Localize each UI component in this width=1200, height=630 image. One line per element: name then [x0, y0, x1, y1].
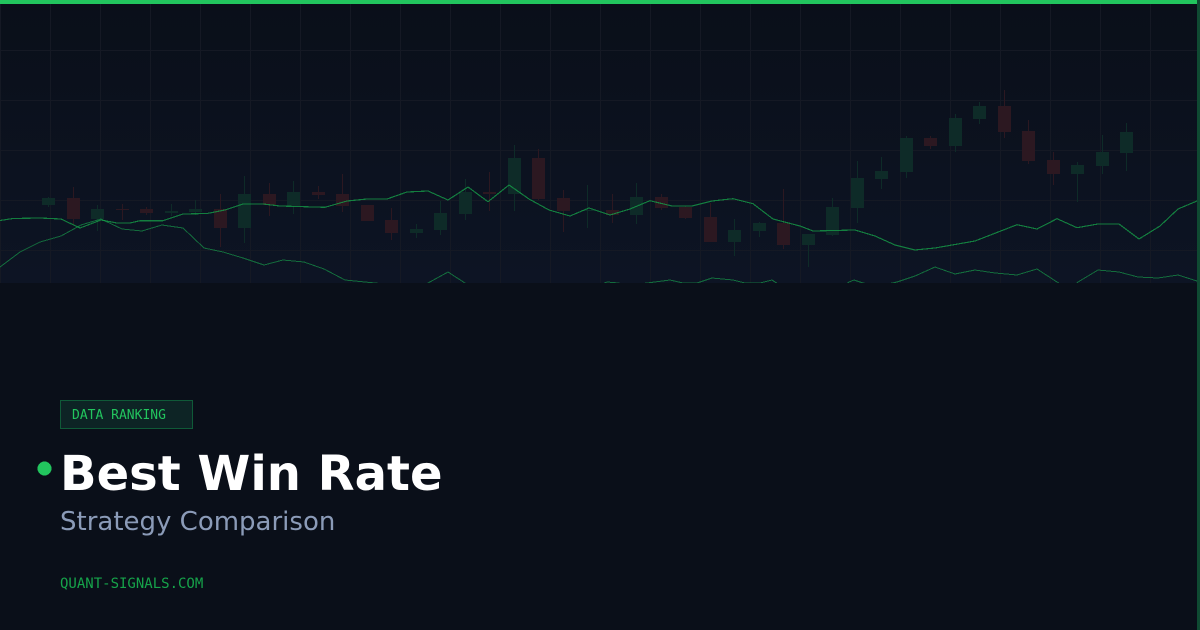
bullet dot	[38, 462, 52, 476]
right accent bar	[1197, 0, 1200, 630]
upper line series	[0, 185, 1197, 250]
chart background panel	[0, 4, 1197, 476]
badge label: DATA RANKING	[72, 408, 166, 423]
candlesticks: red	[67, 90, 1060, 249]
title: Best Win Rate	[60, 446, 442, 502]
site url: QUANT-SIGNALS.COM	[60, 576, 203, 592]
candlesticks: green	[42, 102, 1133, 267]
top accent bar	[0, 0, 1197, 4]
category badge	[60, 400, 193, 429]
lower line series	[0, 218, 1197, 283]
subtitle: Strategy Comparison	[60, 507, 335, 537]
